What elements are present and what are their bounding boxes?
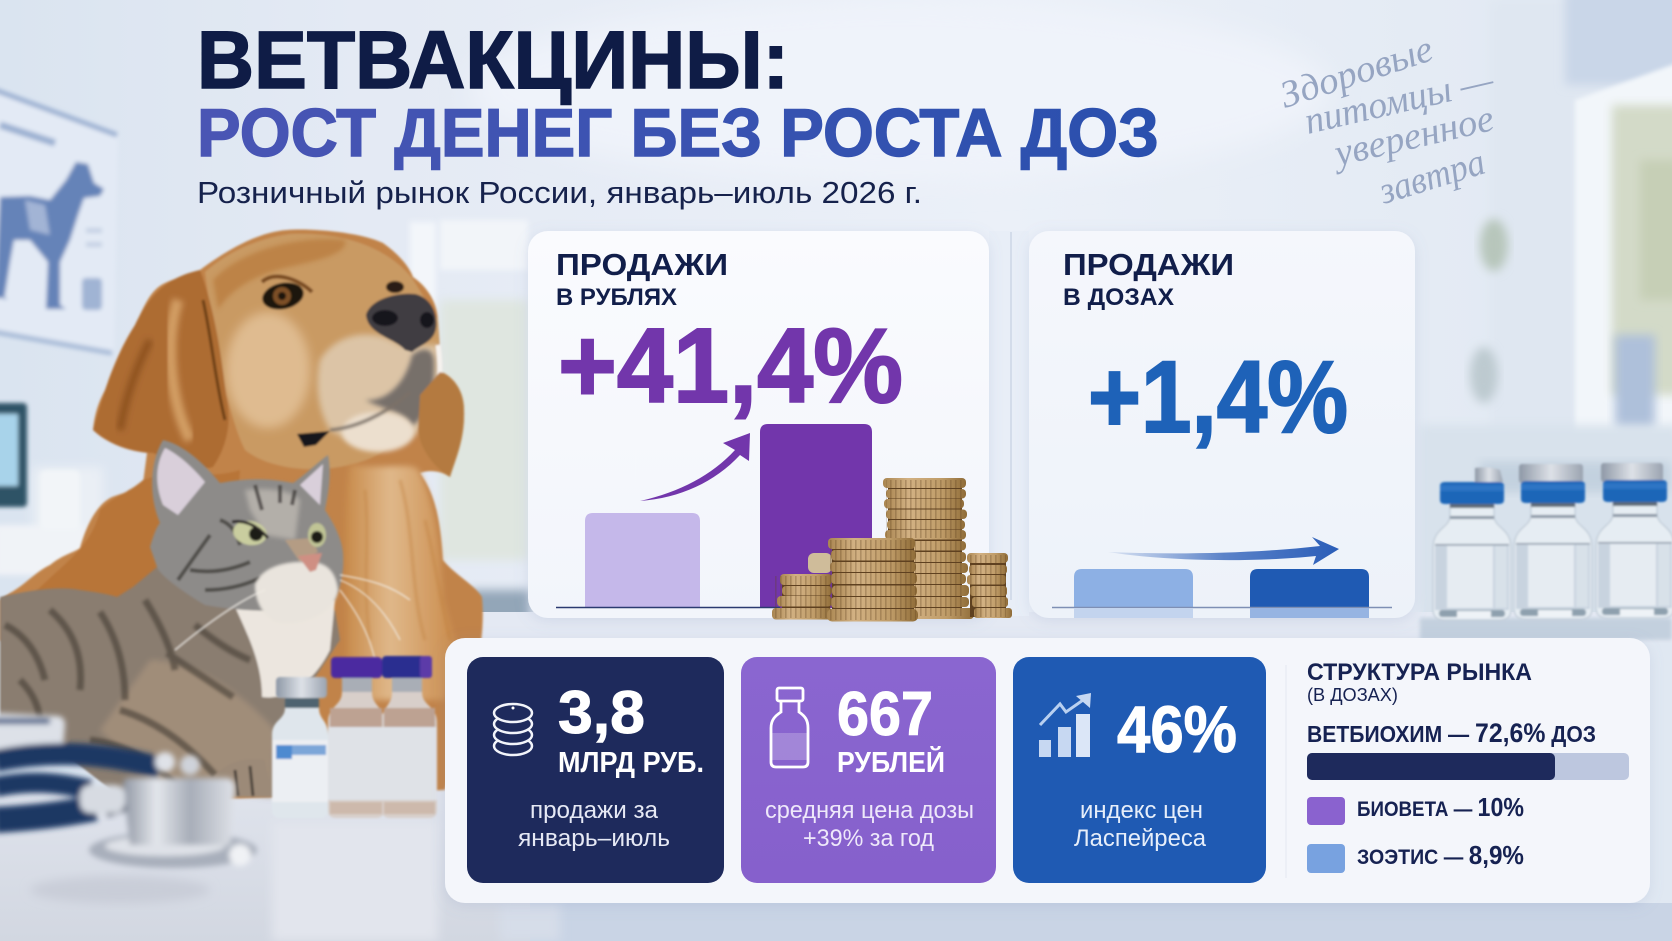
cat photo: tabby: [0, 440, 410, 797]
bar: previous year: [585, 513, 700, 608]
handwritten slogan: питомцы —: [1301, 59, 1497, 143]
dog muzzle: [318, 335, 440, 445]
cat head: [150, 440, 343, 611]
value: +1,4%: +1,4%: [1088, 340, 1348, 454]
arrow: growth: [640, 433, 750, 501]
coins stacks: [772, 478, 1012, 622]
vial 1: [1433, 482, 1511, 620]
heading: sales in doses: В ДОЗАХ: [1063, 284, 1174, 311]
dog jaw line: [330, 392, 410, 430]
dog muzzle white edge: [420, 345, 440, 433]
dog body fur: [0, 230, 483, 800]
panel: key metrics strip: [445, 638, 1650, 903]
bar: previous year: [1074, 569, 1193, 618]
poster: dog anatomy on wall: [0, 90, 118, 353]
icon: bottle: [771, 688, 808, 767]
vial 2 cap: [1519, 464, 1583, 483]
swatch: Bioveta: [1307, 797, 1345, 825]
stethoscope tubes: [0, 754, 160, 820]
panel: sales in rubles: [528, 231, 989, 618]
cat chest tan: [100, 660, 275, 797]
dog mouth grey: [365, 350, 434, 426]
dog forehead shade: [213, 239, 345, 310]
caption: январь–июль: [518, 825, 670, 852]
coin stack: front: [827, 538, 918, 622]
dog eyes: [260, 277, 404, 313]
heading: sales in doses: ПРОДАЖИ: [1063, 247, 1234, 282]
vial 3: [1596, 480, 1672, 618]
dog nostrils: [372, 310, 434, 328]
value: 3,8: 3,8: [558, 679, 645, 746]
vial 3 cap: [1601, 463, 1663, 482]
label: Zoetis: ЗОЭТИС — 8,9%: [1357, 840, 1524, 870]
dog lower jaw: [342, 412, 414, 452]
poster dog silhouette: [0, 162, 104, 309]
caption: средняя цена дозы: [765, 797, 974, 824]
cat chest white: [232, 600, 335, 697]
divider between panels: [1010, 232, 1012, 600]
axis: [1052, 608, 1392, 618]
axis: [556, 606, 780, 608]
subtitle: Розничный рынок России, январь–июль 2026 г.: [197, 175, 922, 210]
progress bar fill: [1307, 753, 1555, 780]
card: average dose price: [741, 657, 996, 883]
card: price index: [1013, 657, 1266, 883]
heading: sales in doses: [1063, 247, 1234, 311]
coin edge ridges: [775, 480, 1006, 620]
handwritten slogan: Здоровые: [1275, 28, 1438, 117]
cat body: [0, 567, 340, 797]
title line 1: ВЕТВАКЦИНЫ:: [197, 15, 789, 106]
stethoscope ring: [0, 713, 65, 752]
handwritten slogan: [1275, 28, 1498, 213]
heading: market structure: СТРУКТУРА РЫНКА: [1307, 659, 1532, 686]
cat head stripes: [178, 485, 295, 590]
dog left ear: [93, 270, 229, 468]
vial 2: [1514, 481, 1592, 619]
caption: Ласпейреса: [1074, 825, 1207, 852]
market structure block: [1307, 659, 1629, 873]
cat stripes: [5, 600, 250, 790]
caption: индекс цен: [1080, 797, 1203, 824]
coin stack: left: [772, 553, 832, 620]
dog neck: [345, 465, 458, 700]
cat eyes: [231, 518, 326, 548]
dog ear highlights: [120, 300, 225, 440]
unit: rubles: РУБЛЕЙ: [837, 745, 945, 779]
swatch: Zoetis: [1307, 844, 1345, 873]
dog nose: [366, 294, 436, 352]
panel: sales in doses: [1029, 231, 1415, 618]
caption: [518, 797, 670, 852]
dog right ear: [418, 372, 464, 477]
vial: purple cap: [328, 657, 384, 818]
cat muzzle: [255, 562, 338, 623]
caption: [1074, 797, 1207, 852]
dog shoulder shade: [20, 470, 240, 620]
stethoscope: [0, 713, 257, 868]
vial: silver cap: [272, 677, 328, 818]
card: total sales: [467, 657, 724, 883]
table surface: [0, 231, 1672, 941]
monitor in the background: [0, 403, 80, 530]
subheading: (В ДОЗАХ): [1307, 685, 1398, 705]
dog face: [205, 234, 440, 469]
label: Vetbiokhim: ВЕТБИОХИМ — 72,6% ДОЗ: [1307, 718, 1596, 748]
handwritten slogan: уверенное: [1327, 97, 1498, 176]
dog mouth: [297, 431, 330, 447]
handwritten slogan: завтра: [1373, 141, 1490, 213]
bar: current year: [760, 424, 872, 608]
cat ear inner: [157, 448, 323, 515]
dog cheek: [226, 312, 310, 428]
caption: [765, 797, 974, 852]
cat nose bridge: [285, 538, 318, 562]
progress bar track: [1307, 753, 1629, 780]
bar: current year: [1250, 569, 1369, 618]
cat forehead light: [245, 489, 300, 540]
coin stack: tall: [883, 478, 974, 619]
heading: sales in rubles: В РУБЛЯХ: [556, 284, 677, 311]
divider before market structure: [1285, 665, 1287, 878]
vial: navy cap: [382, 656, 437, 818]
value: +41,4%: +41,4%: [558, 307, 903, 425]
heading: sales in rubles: [556, 247, 728, 311]
caption: продажи за: [530, 797, 659, 824]
icon: coin stack: [494, 704, 532, 755]
arrow: flat: [1108, 537, 1339, 565]
vials: right group: [1433, 463, 1672, 620]
title line 2: РОСТ ДЕНЕГ БЕЗ РОСТА ДОЗ: [197, 95, 1159, 171]
value: 46%: 46%: [1117, 692, 1237, 766]
cat whiskers: [175, 575, 410, 660]
cat nose: [298, 553, 322, 572]
icon: growth chart: [1039, 693, 1091, 757]
heading: sales in rubles: ПРОДАЖИ: [556, 247, 728, 282]
unit: billion rubles: МЛРД РУБ.: [558, 747, 704, 779]
caption: +39% за год: [803, 825, 934, 852]
coin stack: right: [967, 553, 1012, 618]
label: Bioveta: БИОВЕТА — 10%: [1357, 792, 1524, 822]
cat paw: [205, 759, 272, 797]
value: 667: 667: [837, 680, 933, 749]
vial 1 cap: [1475, 467, 1503, 482]
dog photo: golden retriever: [0, 230, 483, 800]
stethoscope chest piece: [80, 752, 257, 868]
dog neck fur strokes: [365, 480, 450, 640]
vials: left group: [272, 656, 437, 818]
